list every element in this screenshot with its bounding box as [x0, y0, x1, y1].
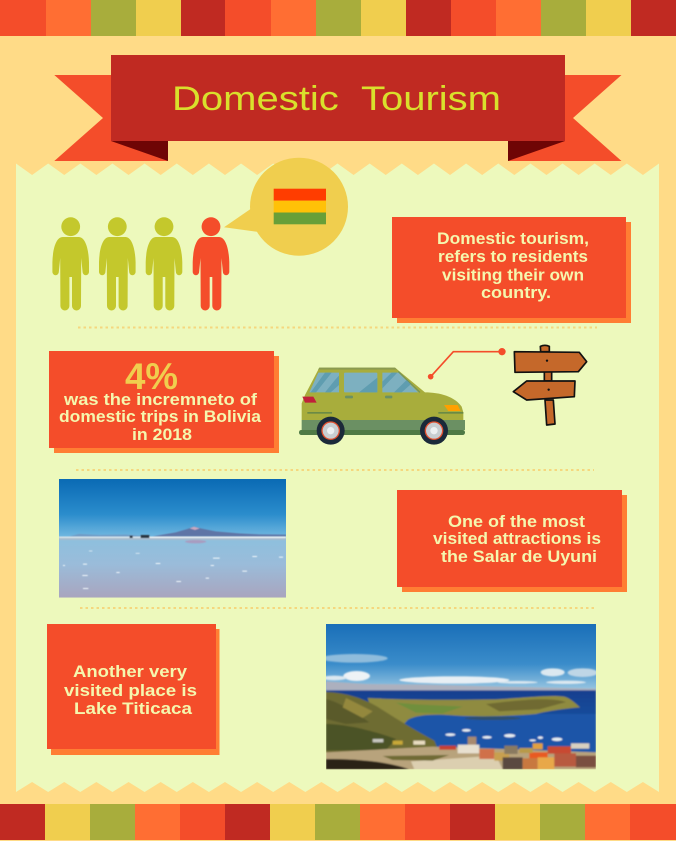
callout: domestic tourism definition: Domestic tourism, [437, 230, 589, 248]
person 1 [52, 217, 89, 310]
callout: domestic tourism definition [392, 217, 631, 323]
callout: domestic tourism definition: visiting their own [442, 266, 584, 284]
callout: Salar de Uyuni: One of the most [448, 513, 586, 531]
speech bubble with Bolivian flag [224, 158, 348, 256]
callout: Lake Titicaca: Lake Titicaca [74, 700, 193, 718]
ribbon right tail [508, 75, 622, 161]
icon: car [299, 368, 465, 445]
callout: 4% statistic: was the incremneto of [63, 391, 258, 409]
mountains [326, 681, 596, 692]
top striped border [0, 0, 676, 36]
arrow: connector from car to signpost [428, 348, 506, 379]
person 3 [146, 217, 182, 310]
lake [326, 690, 596, 754]
left hill [326, 692, 439, 756]
callout: Salar de Uyuni: the Salar de Uyuni [441, 548, 597, 566]
stat number: 4% [125, 356, 178, 397]
peninsula [368, 696, 580, 727]
callout: Lake Titicaca: visited place is [64, 682, 197, 700]
icon: wooden signpost [513, 345, 587, 425]
callout: 4% statistic: in 2018 [132, 426, 192, 444]
title ribbon [54, 55, 622, 161]
callout: domestic tourism definition: refers to residents [438, 248, 588, 266]
bay [403, 714, 596, 751]
boats [445, 729, 562, 741]
title: Domestic Tourism [172, 80, 501, 118]
callout: Lake Titicaca [47, 624, 220, 755]
callout: Salar de Uyuni: visited attractions is [433, 530, 601, 548]
ribbon left tail [54, 75, 168, 161]
callout: domestic tourism definition: country. [481, 284, 551, 302]
photo: Salar de Uyuni [59, 479, 286, 598]
callout: 4% statistic: domestic trips in Bolivia [59, 408, 262, 426]
ribbon main band [111, 55, 565, 141]
town [373, 737, 596, 769]
bottom striped border [0, 804, 676, 840]
callout: Lake Titicaca: Another very [73, 663, 188, 681]
ribbon right fold [508, 141, 565, 161]
icon: row of people [52, 217, 229, 310]
person 2 [99, 217, 136, 310]
icon: flag [274, 189, 326, 224]
callout: 4% statistic [49, 351, 279, 453]
callout: Salar de Uyuni [397, 490, 627, 592]
person 4 highlighted [193, 217, 229, 310]
photo: Lake Titicaca [321, 624, 598, 769]
shore and sand [326, 747, 596, 769]
ribbon left fold [111, 141, 168, 161]
panel: zigzag content background [16, 164, 659, 792]
clouds [321, 654, 598, 684]
